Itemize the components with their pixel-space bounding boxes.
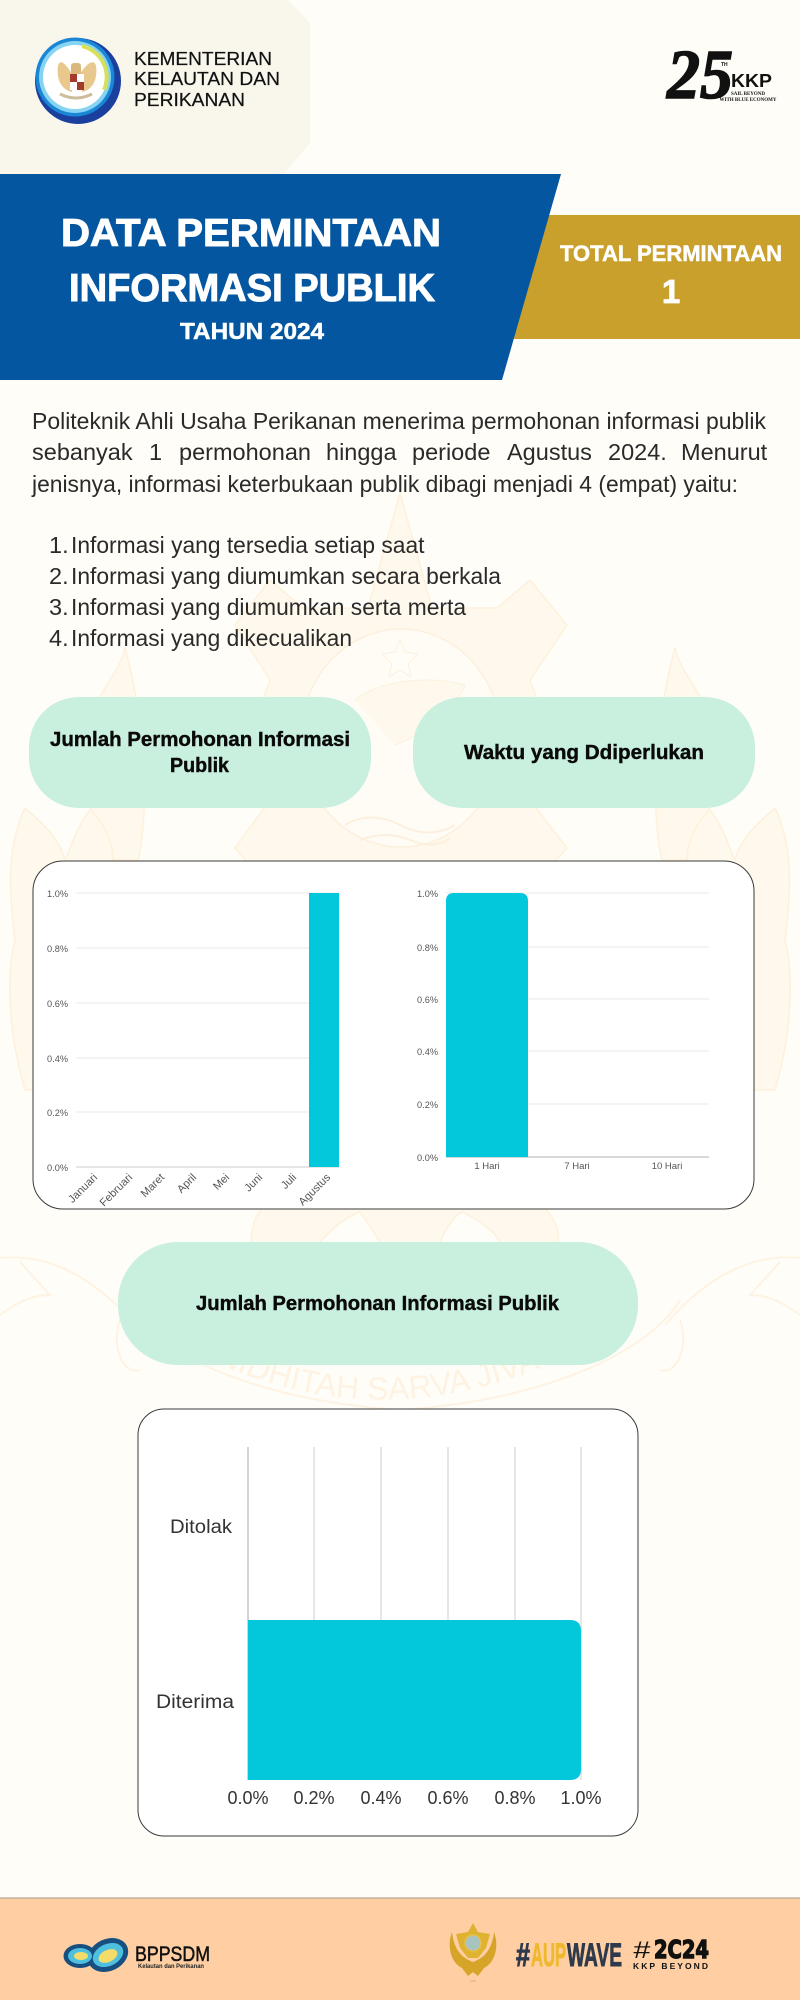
numbered list: 4.: [49, 625, 69, 651]
heading pill: waktu: Waktu yang Ddiperlukan: [464, 742, 704, 764]
numbered list: Informasi yang tersedia setiap saat: [71, 532, 425, 558]
bar chart: waktu yang diperlukan: 0.0%: [417, 1153, 438, 1163]
intro paragraph: periode: [412, 439, 490, 465]
icon: 25th anniversary KKP logo: KKP: [731, 71, 772, 91]
bar chart: permohonan per bulan: Juni: [242, 1172, 265, 1194]
header panel: ministry logo background: [0, 0, 310, 175]
bar chart: diterima dan ditolak: 0.6%: [427, 1788, 469, 1808]
intro paragraph: sebanyak: [32, 439, 133, 465]
total requests label: TOTAL PERMINTAAN: [560, 241, 782, 266]
bar chart: waktu yang diperlukan: 1.0%: [417, 889, 438, 899]
icon: 2024 KKP Beyond logo: KKP BEYOND: [633, 1961, 708, 1971]
bar chart: diterima dan ditolak: 0.8%: [494, 1788, 536, 1808]
bar chart: permohonan per bulan: Februari: [98, 1172, 135, 1209]
panel: title blue banner: [0, 174, 561, 380]
heading pill: jumlah permohonan: Jumlah Permohonan Informasi: [50, 729, 350, 751]
heading pill: jumlah permohonan: [29, 697, 371, 808]
icon: 25th anniversary KKP logo: WITH BLUE ECONOMY: [720, 98, 777, 103]
icon: gold garuda emblem: AUP: [470, 1979, 476, 1983]
icon: 2024 KKP Beyond logo: [633, 1935, 709, 1971]
icon: 2024 KKP Beyond logo: #: [633, 1937, 651, 1964]
intro paragraph: permohonan: [179, 439, 311, 465]
icon: 25th anniversary KKP logo: [666, 37, 777, 114]
bar chart: permohonan per bulan: Mei: [211, 1172, 232, 1193]
intro paragraph: [31, 408, 768, 497]
heading pill: jumlah permohonan: Publik: [170, 755, 230, 777]
bar chart: permohonan per bulan: 1.0%: [47, 889, 68, 899]
ministry name: KELAUTAN DAN: [134, 68, 280, 89]
numbered list: Informasi yang diumumkan serta merta: [71, 594, 467, 620]
intro paragraph: jenisnya, informasi keterbukaan publik dibagi menjadi 4 (empat) yaitu:: [31, 471, 738, 497]
heading pill: waktu: [413, 697, 755, 808]
bar chart: waktu yang diperlukan: 7 Hari: [564, 1161, 590, 1172]
campaign hashtag: #: [516, 1937, 530, 1973]
intro paragraph: Menurut: [681, 439, 768, 465]
heading pill: jumlah permohonan informasi publik: [118, 1242, 638, 1365]
icon: BPPSDM logo: Kelautan dan Perikanan: [138, 1964, 204, 1970]
year: TAHUN 2024: [180, 318, 324, 344]
bar chart: permohonan per bulan: Juli: [279, 1172, 299, 1192]
bar chart: permohonan per bulan: 0.4%: [47, 1054, 68, 1064]
bar chart: waktu yang diperlukan: 1 Hari: [474, 1161, 500, 1172]
footer band: [0, 1898, 800, 2000]
bar chart: diterima dan ditolak: Diterima: [156, 1692, 234, 1713]
icon: BPPSDM logo: BPPSDM: [135, 1943, 210, 1966]
numbered list: 1.: [49, 532, 69, 558]
panel: diterima ditolak chart card: [138, 1409, 638, 1836]
intro paragraph: 1: [149, 439, 162, 465]
campaign hashtag: AUP: [531, 1937, 566, 1973]
bar chart: diterima dan ditolak: [156, 1447, 602, 1808]
numbered list: 3.: [49, 594, 69, 620]
ministry name: KEMENTERIAN: [134, 48, 272, 69]
bar chart: permohonan per bulan: 0.0%: [47, 1163, 68, 1173]
bar chart: permohonan per bulan: Maret: [139, 1172, 167, 1200]
title: DATA PERMINTAAN: [61, 212, 441, 255]
icon: ministry round logo with garuda: [35, 38, 121, 124]
panel: total requests gold band: [514, 215, 800, 339]
bar chart: waktu yang diperlukan: 0.8%: [417, 943, 438, 953]
ministry name: PERIKANAN: [134, 89, 245, 110]
bar chart: diterima dan ditolak: 0.0%: [227, 1788, 269, 1808]
intro paragraph: Agustus: [507, 439, 592, 465]
bar chart: permohonan per bulan: 0.6%: [47, 999, 68, 1009]
bar chart: diterima dan ditolak: Ditolak: [170, 1517, 233, 1538]
numbered list: Informasi yang diumumkan secara berkala: [71, 563, 502, 589]
icon: gold garuda emblem: [450, 1923, 496, 1983]
campaign hashtag: [516, 1937, 622, 1973]
intro paragraph: 2024.: [608, 439, 667, 465]
watermark emblem: [0, 492, 800, 1408]
campaign hashtag: WAVE: [567, 1937, 622, 1973]
icon: 25th anniversary KKP logo: 25: [666, 37, 733, 114]
ministry name: [134, 48, 280, 110]
bar chart: waktu yang diperlukan: 0.2%: [417, 1100, 438, 1110]
icon: BPPSDM logo: [64, 1932, 210, 1978]
bar chart: permohonan per bulan: 0.2%: [47, 1108, 68, 1118]
bar chart: waktu yang diperlukan: 0.6%: [417, 995, 438, 1005]
bar chart: diterima dan ditolak: 0.2%: [293, 1788, 335, 1808]
icon: 25th anniversary KKP logo: SAIL BEYOND: [731, 92, 765, 97]
numbered list: 2.: [49, 563, 69, 589]
bar chart: permohonan per bulan: 0.8%: [47, 944, 68, 954]
bar chart: waktu yang diperlukan: 10 Hari: [652, 1161, 682, 1172]
intro paragraph: hingga: [326, 439, 397, 465]
icon: 25th anniversary KKP logo: TH: [721, 62, 728, 68]
title line 2: INFORMASI PUBLIK: [69, 267, 435, 310]
bar chart: permohonan per bulan: Agustus: [297, 1171, 333, 1208]
panel: two column charts card: [33, 861, 754, 1209]
bar chart: waktu yang diperlukan: [417, 889, 709, 1172]
numbered list: [49, 532, 502, 651]
watermark emblem: NIDHITAH SARVA JIVA: [230, 1365, 540, 1400]
bar chart: permohonan per bulan: April: [175, 1172, 199, 1196]
heading pill: jumlah permohonan informasi publik: Jumlah Permohonan Informasi Publik: [196, 1293, 560, 1315]
icon: 2024 KKP Beyond logo: 2C24: [654, 1935, 709, 1964]
intro paragraph: Politeknik Ahli Usaha Perikanan menerima permohonan informasi publik: [32, 408, 766, 434]
bar chart: permohonan per bulan: Januari: [66, 1172, 100, 1206]
bar chart: permohonan per bulan: [47, 889, 339, 1209]
bar chart: diterima dan ditolak: 0.4%: [360, 1788, 402, 1808]
bar chart: waktu yang diperlukan: 0.4%: [417, 1047, 438, 1057]
numbered list: Informasi yang dikecualikan: [71, 625, 352, 651]
total requests number: 1: [662, 273, 680, 310]
bar chart: diterima dan ditolak: 1.0%: [560, 1788, 602, 1808]
